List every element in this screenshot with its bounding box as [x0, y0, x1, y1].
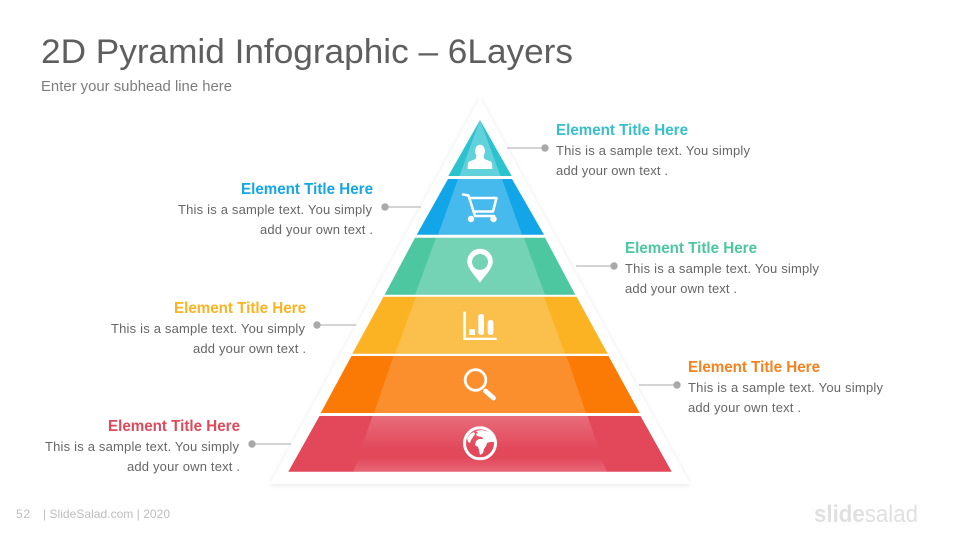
callout: element 3: add your own text . — [625, 281, 737, 296]
title: 2D Pyramid Infographic – 6Layers — [41, 33, 573, 71]
callout: element 2: add your own text . — [260, 222, 373, 237]
icon: globe — [464, 428, 496, 459]
callout: element 5: Element Title Here — [688, 359, 820, 376]
callout: element 6: Element Title Here — [108, 418, 240, 435]
layer 6: red — [288, 416, 672, 472]
callout: element 2: This is a sample text. You simply — [178, 202, 372, 217]
layer 4: yellow — [352, 297, 608, 354]
icon: person — [468, 145, 492, 169]
callout: element 1: This is a sample text. You simply — [556, 143, 750, 158]
icon: location pin — [467, 249, 493, 283]
icon: shopping cart — [463, 194, 496, 221]
icon: magnifier — [465, 370, 494, 398]
callout: element 1: Element Title Here — [556, 122, 688, 139]
layer 1: teal — [448, 120, 512, 176]
callout: element 5 — [639, 359, 884, 415]
callout: element 3: Element Title Here — [625, 240, 757, 257]
callout: element 4: Element Title Here — [174, 300, 306, 317]
callout: element 3: This is a sample text. You simply — [625, 261, 820, 276]
pyramid backing triangle — [270, 98, 690, 484]
callout: element 4: This is a sample text. You simply — [111, 321, 306, 336]
callout: element 6: add your own text . — [127, 459, 240, 474]
footer: page number and credit: 52 — [16, 507, 30, 521]
callout: element 3 — [576, 240, 820, 296]
callout: element 4: add your own text . — [193, 341, 306, 356]
callout: element 1 — [507, 122, 750, 178]
layer 5: orange — [321, 356, 640, 413]
layer 2: blue — [417, 179, 544, 235]
callout: element 2 — [178, 181, 421, 237]
pyramid — [270, 98, 690, 484]
callout: element 4 — [111, 300, 356, 356]
logo: slidesalad: slidesalad — [814, 501, 918, 528]
callout: element 5: This is a sample text. You simply — [688, 380, 884, 395]
layer 3: green — [385, 238, 575, 295]
subhead: Enter your subhead line here — [41, 79, 232, 95]
callout: element 6 — [45, 418, 291, 474]
callout: element 5: add your own text . — [688, 400, 801, 415]
callout: element 6: This is a sample text. You simply — [45, 439, 240, 454]
callout: element 1: add your own text . — [556, 163, 668, 178]
icon: bar chart — [463, 312, 497, 340]
footer: page number and credit: | SlideSalad.com | 2020 — [43, 507, 170, 521]
callout: element 2: Element Title Here — [241, 181, 373, 198]
